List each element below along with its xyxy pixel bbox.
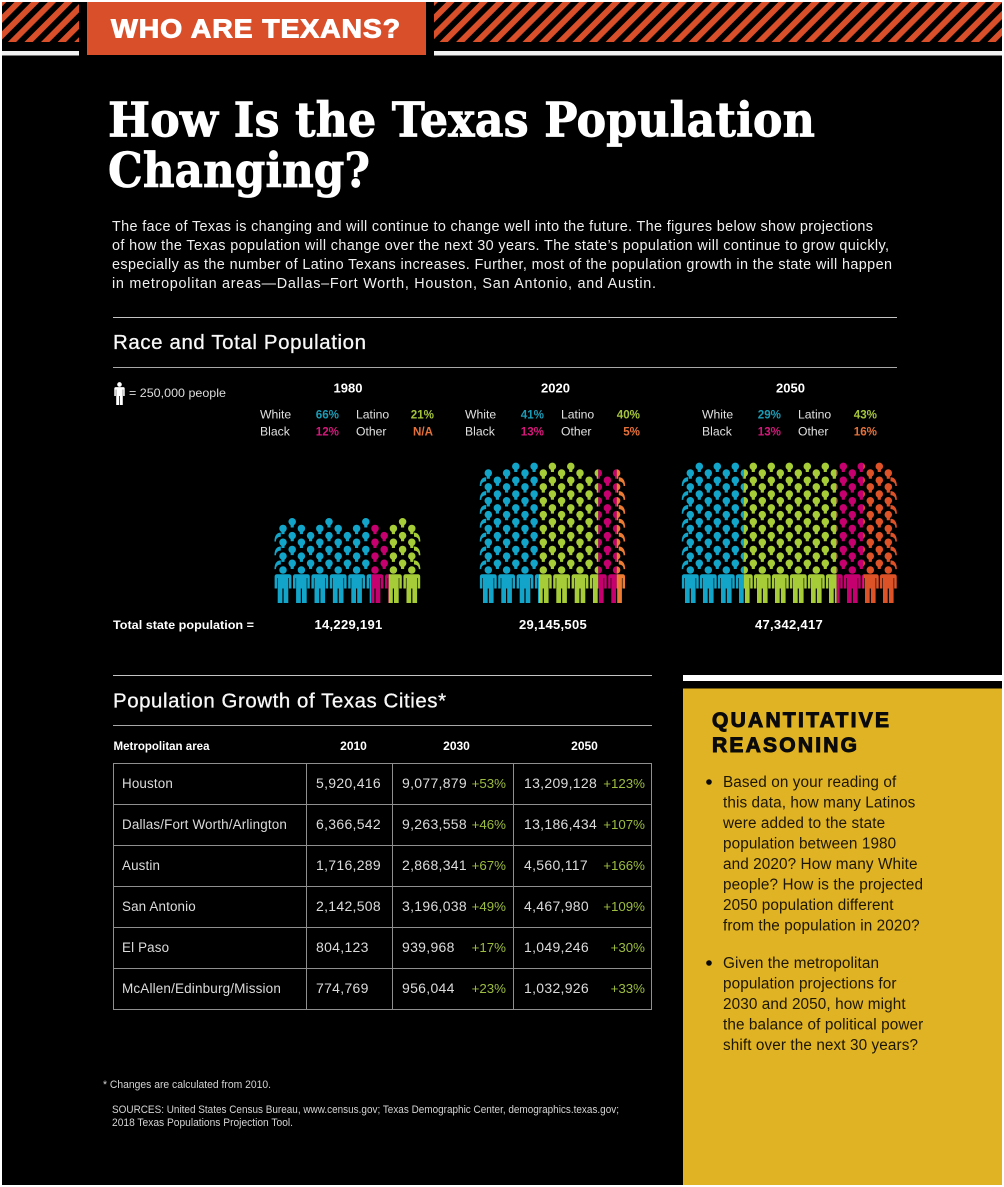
row: El Paso: 1,049,246 — [524, 939, 589, 955]
row: El Paso: 939,968 — [402, 939, 455, 955]
table header: 2050 — [571, 739, 598, 753]
title: Changing? — [108, 143, 370, 199]
row: San Antonio: +109% — [603, 899, 645, 914]
table header: 2010 — [340, 739, 367, 753]
chart: 1980 breakdown: Other — [356, 424, 386, 438]
row: Austin: 4,560,117 — [524, 857, 588, 873]
question two — [706, 955, 923, 1054]
chart: 2050 breakdown: 43% — [854, 408, 877, 422]
row: McAllen: +33% — [611, 981, 645, 996]
legend: one icon equals 250,000 people — [114, 382, 226, 405]
row: Austin: 1,716,289 — [316, 857, 381, 873]
row: McAllen: +23% — [472, 981, 506, 996]
panel: quantitative reasoning — [683, 675, 1002, 1185]
panel: race and total population — [113, 317, 903, 632]
footnote and sources: SOURCES: United States Census Bureau, www.census.gov; Texas Demographic Center, demographics.texas.gov; — [112, 1104, 619, 1116]
intro paragraph: in metropolitan areas—Dallas–Fort Worth, Houston, San Antonio, and Austin. — [112, 276, 656, 292]
chart: 1980 breakdown: White — [260, 408, 291, 422]
chart: 2050 breakdown: 16% — [854, 426, 877, 438]
row: San Antonio: San Antonio — [122, 899, 196, 914]
row: Dallas — [122, 816, 645, 832]
row: McAllen: 956,044 — [402, 980, 455, 996]
row: Houston: 5,920,416 — [316, 775, 381, 791]
chart: 2050 breakdown: Black — [702, 424, 733, 438]
section tab label: WHO ARE TEXANS? — [111, 16, 401, 44]
chart: 2050 breakdown: Other — [798, 424, 828, 438]
row: Houston: Houston — [122, 776, 173, 791]
question one: 2050 population different — [723, 897, 894, 914]
footnote and sources — [103, 1079, 619, 1129]
row: El Paso: +17% — [472, 940, 506, 955]
row: San Antonio: 2,142,508 — [316, 898, 381, 914]
question one: were added to the state — [722, 815, 885, 832]
footnote and sources: * Changes are calculated from 2010. — [103, 1079, 271, 1091]
panel: population growth of Texas cities — [113, 675, 652, 1010]
rule: left — [2, 51, 79, 56]
row: McAllen: 774,769 — [316, 980, 369, 996]
row: Houston: 9,077,879 — [402, 775, 467, 791]
header band — [2, 2, 1002, 56]
total state population row: 14,229,191 — [314, 617, 383, 632]
row: El Paso: +30% — [611, 940, 645, 955]
row: Houston: +53% — [472, 776, 506, 791]
question two: the balance of political power — [723, 1016, 923, 1034]
row: Dallas: +107% — [603, 817, 645, 832]
pictogram: 1980 population — [274, 518, 420, 603]
question one: this data, how many Latinos — [723, 794, 916, 812]
row: McAllen: 1,032,926 — [524, 980, 589, 996]
row: Dallas: 13,186,434 — [524, 816, 597, 832]
chart: 2020 breakdown — [465, 380, 640, 438]
row: McAllen: McAllen/Edinburg/Mission — [122, 981, 281, 996]
row: Dallas: 6,366,542 — [316, 816, 381, 832]
chart: 2050 breakdown: 2050 — [776, 380, 805, 396]
chart: 2050 breakdown: White — [702, 408, 733, 422]
chart: 2020 breakdown: Other — [561, 424, 591, 438]
chart: 1980 breakdown: 1980 — [334, 380, 362, 396]
heading: quantitative reasoning — [712, 709, 889, 757]
table header — [114, 739, 598, 753]
table header: Metropolitan area — [114, 740, 210, 753]
chart: 1980 breakdown — [260, 380, 434, 438]
row: San Antonio: 3,196,038 — [402, 898, 467, 914]
chart: 2050 breakdown — [702, 380, 877, 438]
intro paragraph — [112, 219, 892, 292]
row: San Antonio: 4,467,980 — [524, 898, 589, 914]
chart: 1980 breakdown: 12% — [316, 426, 339, 438]
row: El Paso: El Paso — [122, 940, 169, 955]
footnote and sources: 2018 Texas Populations Projection Tool. — [112, 1117, 293, 1129]
row: Houston: +123% — [603, 776, 645, 791]
chart: 2020 breakdown: 5% — [623, 426, 640, 438]
row: Dallas: 9,263,558 — [402, 816, 467, 832]
section tab — [87, 2, 426, 55]
question one: from the population in 2020? — [723, 918, 920, 934]
row: San Antonio: +49% — [472, 899, 506, 914]
chart: 2020 breakdown: White — [465, 408, 496, 422]
row: El Paso: 804,123 — [316, 939, 369, 955]
chart: 2020 breakdown: 13% — [521, 426, 544, 438]
question one: people? How is the projected — [723, 876, 923, 894]
row: Austin: 2,868,341 — [402, 857, 467, 873]
heading: quantitative reasoning: REASONING — [712, 734, 857, 757]
intro paragraph: especially as the number of Latino Texans increases. Further, most of the population growth in the state will happen — [112, 257, 892, 273]
total state population row — [113, 617, 823, 632]
chart: 1980 breakdown: Latino — [356, 408, 389, 422]
question one: and 2020? How many White — [723, 856, 918, 873]
question two: shift over the next 30 years? — [723, 1037, 918, 1054]
chart: 1980 breakdown: 21% — [411, 408, 434, 422]
row: Dallas: Dallas/Fort Worth/Arlington — [122, 817, 287, 832]
row: McAllen — [122, 980, 645, 996]
chart: 2050 breakdown: Latino — [798, 408, 831, 422]
chart: 1980 breakdown: 66% — [316, 408, 339, 422]
question two: 2030 and 2050, how might — [723, 996, 906, 1013]
total state population row: 47,342,417 — [755, 617, 823, 632]
row: Houston — [122, 775, 645, 791]
pictogram: 2020 population — [480, 462, 626, 603]
table header: 2030 — [443, 739, 470, 753]
stripes: left — [2, 2, 79, 42]
row: Austin: +67% — [472, 858, 506, 873]
question two: Given the metropolitan — [723, 955, 879, 972]
intro paragraph: of how the Texas population will change over the next 30 years. The state’s population will continue to grow quickly, — [112, 238, 889, 254]
total state population row: Total state population = — [113, 618, 254, 632]
table grid — [114, 764, 652, 1010]
question one — [706, 774, 923, 934]
chart: 2020 breakdown: 2020 — [541, 380, 570, 396]
row: Austin — [122, 857, 645, 873]
chart: 2020 breakdown: Latino — [561, 408, 594, 422]
rule: right — [434, 51, 1002, 56]
intro paragraph: The face of Texas is changing and will continue to change well into the future. The figures below show projections — [112, 219, 873, 235]
chart: 1980 breakdown: N/A — [413, 426, 434, 438]
question one: population between 1980 — [723, 836, 896, 852]
legend: one icon equals 250,000 people: = 250,000 people — [129, 386, 226, 400]
row: San Antonio — [122, 898, 645, 914]
row: Austin: +166% — [603, 858, 645, 873]
chart: 2050 breakdown: 29% — [758, 408, 781, 422]
row: El Paso — [122, 939, 645, 955]
chart: 2050 breakdown: 13% — [758, 426, 781, 438]
title: How Is the Texas Population — [108, 92, 815, 148]
question one: Based on your reading of — [723, 774, 897, 791]
total state population row: 29,145,505 — [519, 617, 587, 632]
chart: 2020 breakdown: 41% — [521, 408, 544, 422]
heading: quantitative reasoning: QUANTITATIVE — [712, 709, 889, 732]
chart: 1980 breakdown: Black — [260, 424, 291, 438]
row: Houston: 13,209,128 — [524, 775, 597, 791]
row: Dallas: +46% — [472, 817, 506, 832]
stripes: right — [434, 2, 1002, 42]
question two: population projections for — [723, 976, 897, 992]
title — [108, 92, 815, 199]
row: Austin: Austin — [122, 858, 160, 873]
heading: population growth: Population Growth of Texas Cities* — [113, 690, 446, 712]
chart: 2020 breakdown: Black — [465, 424, 496, 438]
heading: race and total population: Race and Total Population — [113, 332, 366, 354]
chart: 2020 breakdown: 40% — [617, 408, 640, 422]
pictogram: 2050 population — [682, 462, 897, 603]
